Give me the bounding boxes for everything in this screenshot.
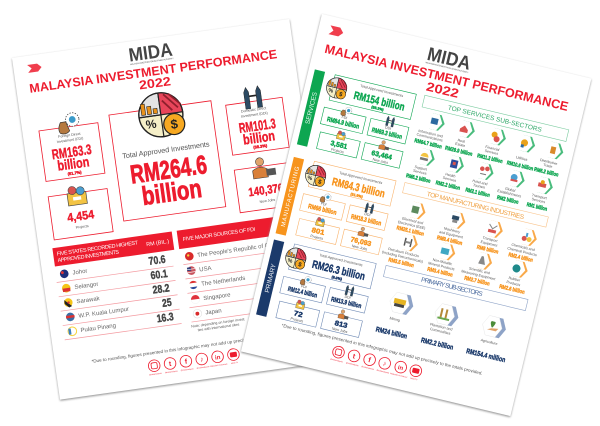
label and value: primary total: (9.9%): [331, 275, 343, 282]
social icons: [147, 348, 241, 376]
label and value: manufacturing total: Total Approved Investments: [339, 171, 383, 185]
box: DDI: DDI: [344, 295, 351, 300]
title: 2022: [138, 74, 172, 93]
item: petroleum: RM3.5 billion: [388, 257, 415, 269]
row: Selangor: Selangor: [74, 282, 99, 291]
icon: towers: [243, 86, 263, 109]
item: transport equipment: RM8 billion: [476, 245, 499, 256]
heading: five states: APPROVED INVESTMENTS: [57, 249, 120, 264]
item: transport: RM1 billion: [526, 202, 548, 213]
item: global: Establishments: [497, 189, 522, 199]
item: financial: [476, 126, 510, 165]
heading: five states: FIVE STATES RECORDED HIGHEST: [56, 240, 139, 258]
item: transport equipment: [476, 218, 506, 256]
row: China: The People's Republic of China: [197, 241, 281, 259]
label and value: services total: Total Approved Investments: [360, 84, 404, 98]
icon: pie: [284, 246, 308, 270]
item: global: [495, 167, 527, 206]
item: distributive: [533, 139, 566, 179]
item: real estate: Real: [457, 138, 465, 144]
item: machinery: RM9.4 billion: [436, 235, 463, 247]
social icons: @midamalaysia: [149, 373, 162, 376]
item: real estate: [444, 118, 480, 158]
icon: chevron: [328, 25, 344, 37]
item: health: RM2.2 billion: [435, 180, 461, 192]
social icons: @midamalaysia: [361, 366, 374, 371]
label: FDI: Foreign Direct: [58, 132, 81, 139]
label: total: Total Approved Investments: [122, 139, 210, 161]
item: information: Information and: [418, 129, 443, 139]
row: Netherlands: The Netherlands: [201, 276, 246, 288]
item: transport equipment: Equipment: [480, 240, 498, 248]
box: FDI: RM84.9 billion: [326, 116, 360, 131]
item: E&E: RM25.1 billion: [396, 225, 425, 238]
row: Netherlands: [186, 265, 307, 293]
box: jobs: New Jobs: [351, 244, 368, 252]
item: utilities: Utilities: [516, 155, 528, 162]
box: FDI: [300, 188, 347, 220]
panel: right sheet: [241, 14, 591, 416]
label: FDI: [56, 131, 84, 144]
item: chemicals: [505, 225, 542, 265]
item: information: Communications: [416, 132, 443, 143]
row: Johor: 70.6: [148, 254, 166, 268]
panel: new jobs: [233, 153, 297, 213]
icon: worker: [251, 156, 276, 179]
social icons: @midamalaysia: [197, 366, 209, 370]
value: DDI: RM101.3: [238, 115, 277, 136]
panel: FDI: [37, 109, 105, 181]
title: 2022: [425, 80, 460, 101]
box: DDI: DDI: [364, 212, 371, 217]
label and value: primary total: RM26.3 billion: [311, 259, 366, 283]
item: scientific: Measuring Equipment: [461, 269, 496, 281]
item: global: RM2 billion: [496, 195, 519, 206]
logo: MIDA: MALAYSIAN INVESTMENT DEVELOPMENT AUTHORITY: [130, 57, 175, 66]
item: machinery: [436, 209, 470, 247]
row: Japan: [190, 294, 311, 322]
heading: top manufacturing: [403, 183, 548, 227]
note: reporting: ties with international sites: [197, 322, 240, 332]
box: jobs: 813: [334, 320, 348, 330]
social icons: Malaysian Investment: [210, 362, 228, 368]
item: plantation: RM2.2 billion: [420, 337, 454, 352]
row: Sarawak: Sarawak: [76, 296, 101, 305]
item: financial: Financial: [485, 145, 500, 152]
icon: pie: [303, 163, 328, 188]
item: machinery: Machinery: [444, 226, 461, 234]
item: support: Services: [413, 169, 427, 176]
item: rubber: Rubber: [508, 276, 521, 283]
icon: pie: [324, 76, 349, 100]
item: utilities: [506, 133, 541, 173]
label: new jobs: New Jobs: [259, 198, 276, 204]
footnote: *Due to rounding, figures presented in this infographic may not add up precisely to the totals provided.: [91, 330, 296, 364]
item: chemicals: Chemicals and: [511, 243, 535, 252]
panel: services: [297, 69, 417, 169]
row: Singapore: [188, 279, 309, 308]
social icons: @midamalaysia: [330, 358, 343, 363]
row: Pulau Pinang: [63, 310, 182, 340]
panel: left sheet: [12, 19, 337, 400]
row: WP Kuala Lumpur: [61, 296, 180, 326]
box: jobs: 63,464: [371, 150, 393, 162]
item: health: Services: [442, 176, 457, 183]
item: machinery: and Equipment: [439, 230, 463, 239]
label and value: primary total: Total Approved Investments: [319, 253, 363, 267]
box: DDI: RM18.3 billion: [350, 213, 382, 228]
box: DDI: RM69.3 billion: [371, 127, 403, 141]
value: total: [128, 149, 212, 212]
item: transport: [526, 175, 555, 213]
item: mining: [375, 289, 417, 341]
item: non-metallic: RM3.4 billion: [427, 267, 454, 279]
box: jobs: New Jobs: [331, 327, 348, 334]
box: projects: Projects: [290, 317, 304, 324]
item: distributive: Distributive: [540, 158, 558, 166]
label and value: services total: (58.2%): [371, 105, 385, 112]
item: agriculture: Agriculture: [480, 338, 498, 346]
item: financial: Services: [484, 149, 499, 156]
item: chemicals: Chemical Products: [507, 246, 537, 257]
heading: primary sub-sectors: PRIMARY SUB-SECTORS: [420, 277, 484, 298]
item: E&E: Electrical and: [402, 216, 424, 225]
box: projects: [316, 126, 362, 158]
box: jobs: [321, 306, 364, 337]
value: FDI: [51, 141, 95, 178]
box: projects: Projects: [310, 234, 324, 241]
social icons: MIDA TV: [410, 377, 418, 382]
value: projects: 4,454: [66, 207, 95, 225]
label and value: manufacturing total: [330, 170, 388, 204]
note: reporting: Note: depending on foreign invest: [191, 317, 245, 329]
item: global: Global: [505, 187, 516, 193]
box: FDI: FDI: [301, 284, 307, 289]
row: Pulau Pinang: Pulau Pinang: [80, 323, 116, 334]
heading: FDI sources: FIVE MAJOR SOURCES OF FDI: [183, 227, 256, 243]
item: petroleum: Petroleum Products: [388, 247, 420, 258]
item: E&E: [396, 199, 431, 238]
label and value: manufacturing total: (31.9%): [350, 192, 364, 199]
social icons: ♪: [382, 360, 387, 368]
icon: pie: [136, 90, 186, 140]
sidebar: manufacturing: MANUFACTURING: [281, 166, 301, 228]
item: transport: Transport: [531, 193, 547, 201]
box: jobs: [340, 223, 384, 255]
item: rubber: RM2.6 billion: [498, 284, 526, 296]
heading: five states: RM (BIL.): [146, 239, 170, 248]
row: Selangor: 60.1: [150, 268, 168, 282]
item: transport: Services: [531, 197, 546, 204]
box: projects: 3,581: [330, 140, 348, 151]
title: MALAYSIA INVESTMENT PERFORMANCE: [323, 42, 570, 114]
value: FDI: RM163.3: [51, 141, 93, 162]
heading: top services: TOP SERVICES SUB-SECTORS: [447, 105, 543, 134]
row: WP Kuala Lumpur: W.P. Kuala Lumpur: [78, 307, 130, 320]
item: health: [435, 153, 468, 192]
row: Sarawak: [59, 281, 178, 311]
box: DDI: [346, 199, 390, 230]
item: petroleum: (Including Petrochemicals): [381, 250, 424, 264]
item: distributive: Trade: [543, 163, 553, 169]
row: Sarawak: 28.2: [152, 282, 170, 297]
item: rubber: Products: [506, 280, 521, 287]
item: mining: Mining: [389, 316, 400, 323]
box: jobs: New Jobs: [372, 157, 389, 165]
row: Selangor: [57, 267, 176, 297]
table: five states: [52, 231, 185, 340]
value: DDI: (38.3%): [253, 143, 268, 150]
label and value: manufacturing total: RM84.3 billion: [331, 176, 386, 200]
social icons: f: [184, 359, 188, 366]
value: FDI: billion: [56, 153, 90, 174]
item: support: Support: [414, 165, 427, 172]
box: DDI: RM13.9 billion: [330, 296, 362, 310]
heading: five states: [56, 236, 170, 264]
icon: money bag: [57, 112, 81, 135]
item: support: [405, 146, 438, 185]
value: new jobs: 140,376: [248, 181, 284, 199]
panel: manufacturing: [276, 156, 396, 258]
row: Johor: [55, 253, 174, 282]
item: support: RM6.2 billion: [405, 173, 431, 185]
sidebar: primary: PRIMARY: [264, 263, 278, 294]
box: projects: Projects: [331, 147, 344, 154]
value: total: billion: [140, 173, 204, 211]
item: agriculture: RM154.4 million: [465, 348, 506, 364]
item: plantation: [420, 301, 463, 352]
logo: MIDA: MALAYSIAN INVESTMENT DEVELOPMENT AUTHORITY: [425, 61, 469, 74]
item: rubber: [498, 258, 532, 296]
box: FDI: [320, 102, 367, 134]
social icons: @midamalaysia: [181, 368, 194, 372]
value: DDI: [238, 115, 279, 151]
item: petroleum: [380, 229, 429, 271]
item: chemicals: RM2.4 billion: [508, 252, 534, 264]
item: agriculture: [465, 312, 515, 364]
social icons: MIDA TV: [231, 361, 239, 365]
icon: chevron: [27, 63, 42, 73]
social icons: [330, 345, 423, 382]
item: information: [414, 110, 449, 151]
row: Japan: Japan: [205, 308, 222, 317]
social icons: @midamalaysia: [345, 362, 358, 367]
box: DDI: [326, 281, 370, 313]
box: FDI: RM12.4 billion: [287, 286, 318, 300]
panel: total approved investments: [107, 86, 226, 221]
label and value: services total: [352, 83, 408, 117]
value: total: RM264.6: [128, 149, 209, 190]
row: Johor: Johor: [72, 269, 88, 277]
label: DDI: Domestic Direct: [241, 106, 266, 114]
box: DDI: [367, 112, 410, 144]
box: FDI: FDI: [320, 202, 327, 207]
social icons: f: [367, 357, 372, 364]
item: hotel: RM2.1 billion: [465, 187, 491, 199]
box: projects: 801: [311, 227, 325, 237]
row: USA: [184, 250, 305, 279]
item: distributive: RM6.2 billion: [533, 167, 559, 179]
social icons: ♪: [200, 356, 204, 364]
item: information: RM64.7 billion: [414, 138, 443, 151]
box: FDI: [280, 271, 327, 303]
box: DDI: DDI: [385, 125, 392, 131]
label and value: primary total: [310, 252, 368, 287]
panel: projects: [47, 182, 113, 240]
panel: primary: [256, 239, 376, 339]
item: transport equipment: Transport: [482, 236, 498, 243]
box: projects: 72: [293, 310, 303, 319]
logo: MIDA: MIDA: [127, 40, 174, 67]
box: FDI: FDI: [341, 115, 348, 120]
value: DDI: billion: [242, 127, 276, 148]
label and value: services total: RM154 billion: [352, 90, 406, 114]
label: DDI: [240, 106, 268, 119]
item: hotel: [465, 160, 497, 199]
label: FDI: Investment (FDI): [56, 136, 84, 144]
heading: top services: [422, 95, 569, 141]
item: financial: RM11.2 billion: [476, 153, 504, 165]
row: China: [182, 236, 303, 265]
item: scientific: RM2.7 billion: [463, 276, 491, 288]
heading: top manufacturing: TOP MANUFACTURING INDUSTRIES: [426, 191, 525, 221]
item: non-metallic: Non-Metallic: [432, 258, 453, 266]
social icons: @midamalaysia: [165, 371, 178, 374]
row: Singapore: Singapore: [203, 292, 232, 302]
item: plantation: Commodities: [430, 327, 451, 336]
item: utilities: RM10.6 billion: [506, 160, 534, 173]
panel: DDI: [224, 83, 289, 155]
value: FDI: (61.7%): [67, 169, 83, 176]
box: projects: [296, 213, 341, 245]
box: projects: [276, 296, 321, 327]
social icons: t: [169, 361, 172, 368]
social icons: in: [215, 355, 221, 362]
sidebar: services: SERVICES: [304, 91, 319, 125]
label: DDI: Investment (DDI): [241, 111, 268, 119]
box: FDI: RM66 billion: [307, 203, 337, 217]
social icons: t: [352, 353, 356, 361]
social icons: in: [397, 365, 404, 372]
item: scientific: Scientific and: [469, 266, 490, 275]
item: real estate: Estate: [455, 142, 466, 148]
label: projects: Projects: [75, 224, 89, 230]
row: WP Kuala Lumpur: 25: [161, 297, 172, 310]
footnote: *Due to rounding, figures presented in this infographic may not add up precisely to the totals provided.: [281, 323, 483, 376]
item: real estate: RM29.9 billion: [444, 146, 473, 158]
item: plantation: Plantation and: [430, 322, 453, 332]
item: E&E: Electronics (E&E): [397, 220, 426, 231]
social icons: Malaysian Investment: [390, 372, 408, 379]
icon: folder gears: [66, 185, 87, 206]
item: hotel: Tourism: [472, 183, 486, 190]
item: scientific: [459, 249, 501, 289]
row: Pulau Pinang: 16.3: [156, 311, 174, 325]
heading: primary sub-sectors: [383, 265, 528, 311]
row: USA: USA: [199, 266, 212, 273]
item: hotel: Hotel and: [472, 179, 488, 186]
table: FDI sources: [177, 212, 322, 333]
item: mining: RM24 billion: [375, 326, 408, 341]
title: MALAYSIA INVESTMENT PERFORMANCE: [28, 47, 278, 96]
item: non-metallic: [426, 240, 460, 279]
item: health: Health: [445, 172, 456, 179]
item: non-metallic: Mineral Products: [428, 261, 455, 271]
box: jobs: [361, 137, 405, 168]
logo: MIDA: MIDA: [425, 44, 473, 75]
social icons: @midamalaysia: [376, 370, 389, 375]
box: jobs: 76,093: [350, 237, 372, 248]
